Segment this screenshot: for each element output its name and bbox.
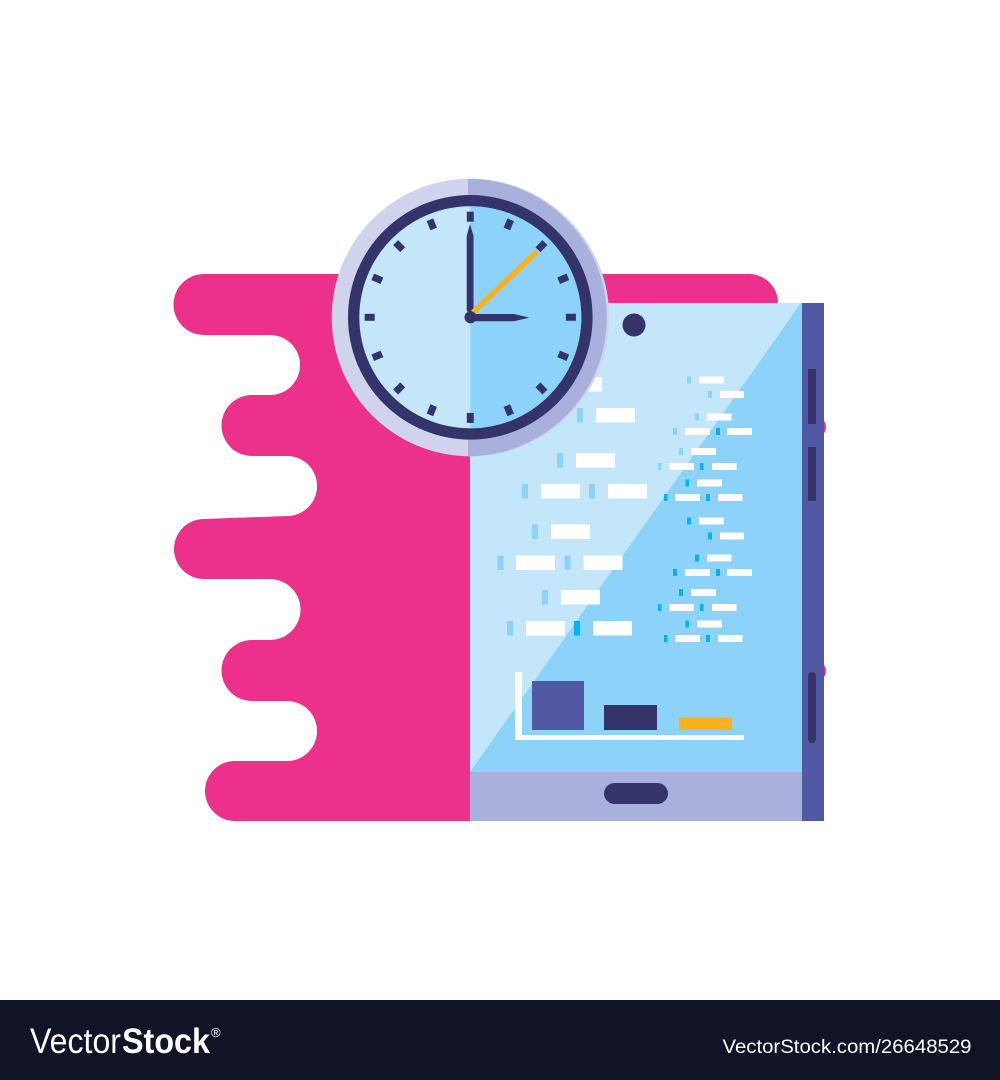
smartphone	[470, 303, 824, 821]
pink wavy blob background	[173, 274, 826, 821]
home button	[604, 783, 668, 804]
small data dashes	[658, 376, 752, 642]
side buttons	[808, 369, 816, 743]
phone screen	[470, 303, 802, 772]
minute hand	[467, 224, 474, 317]
footer bar	[0, 1000, 1000, 1080]
clock dark rim	[348, 195, 593, 440]
footer logo: Stock	[122, 1022, 210, 1061]
clock tick marks	[365, 212, 576, 423]
bar: large	[532, 681, 584, 730]
bar: small	[679, 718, 732, 730]
footer logo: ®	[211, 1025, 221, 1040]
large data dashes	[498, 377, 647, 636]
bar chart	[515, 672, 744, 740]
screen glare triangle	[470, 303, 801, 772]
chart axes	[515, 672, 744, 740]
footer logo: Vector	[30, 1022, 121, 1061]
second hand	[473, 252, 537, 312]
bar: medium	[604, 705, 657, 730]
clock	[332, 179, 609, 456]
phone side edge	[802, 303, 824, 821]
clock face	[359, 206, 581, 428]
footer image id: VectorStock.com/26648529	[722, 1036, 972, 1058]
footer logo	[30, 1022, 221, 1061]
phone bottom bezel	[470, 772, 802, 821]
camera	[622, 314, 646, 336]
hour hand	[470, 314, 530, 321]
clock outer ring	[332, 179, 609, 456]
clock centre pin	[464, 311, 476, 323]
